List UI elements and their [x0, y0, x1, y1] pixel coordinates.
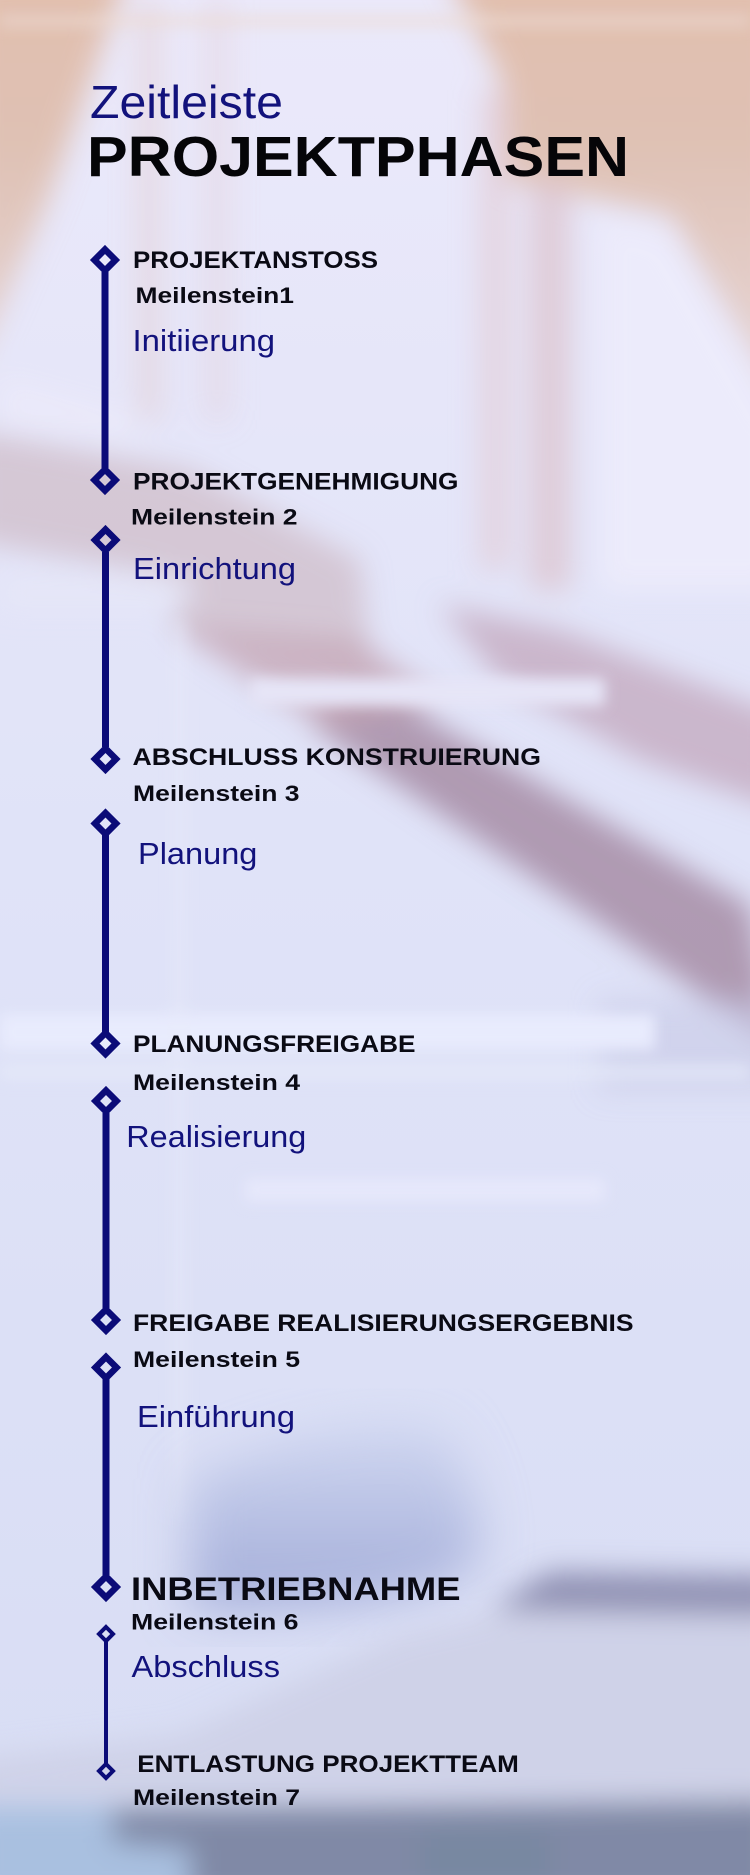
phase 4: Realisierung	[96, 1031, 416, 1330]
timeline bar	[102, 1113, 110, 1308]
phase 2: Einrichtung	[95, 468, 458, 770]
icon: end diamond	[95, 748, 116, 770]
milestone label: Meilenstein 2	[131, 504, 298, 530]
icon: start diamond	[95, 530, 116, 550]
icon: start diamond	[96, 1357, 116, 1378]
milestone title: PLANUNGSFREIGABE	[133, 1031, 416, 1058]
milestone label: Meilenstein 4	[133, 1070, 301, 1095]
timeline bar	[102, 1379, 110, 1575]
phase name: Realisierung	[126, 1119, 306, 1154]
milestone title: PROJEKTANSTOSS	[133, 247, 378, 274]
phase 5: Einführung	[96, 1310, 634, 1598]
icon: start diamond	[96, 1090, 116, 1112]
phase name: Abschluss	[132, 1649, 280, 1684]
title line: Zeitleiste: Zeitleiste	[90, 76, 283, 128]
phase name: Einführung	[137, 1399, 295, 1434]
milestone title: PROJEKTGENEHMIGUNG	[133, 468, 458, 496]
icon: end diamond	[99, 1764, 113, 1778]
milestone title: ENTLASTUNG PROJEKTTEAM	[137, 1751, 519, 1778]
milestone title: FREIGABE REALISIERUNGSERGEBNIS	[133, 1310, 634, 1337]
milestone label: Meilenstein1	[136, 283, 294, 308]
title line: PROJEKTPHASEN: PROJEKTPHASEN	[87, 125, 629, 189]
milestone label: Meilenstein 7	[133, 1785, 300, 1810]
phase name: Initiierung	[132, 323, 275, 358]
milestone label: Meilenstein 5	[133, 1347, 300, 1372]
icon: end diamond	[94, 470, 116, 490]
title	[87, 76, 629, 189]
final milestone	[133, 1751, 519, 1810]
milestone title: ABSCHLUSS KONSTRUIERUNG	[132, 744, 541, 771]
icon: end diamond	[95, 1033, 116, 1054]
icon: end diamond	[96, 1576, 116, 1598]
milestone label: Meilenstein 3	[133, 781, 300, 806]
phase 1: Initiierung	[94, 247, 378, 490]
icon: start diamond	[94, 250, 116, 270]
icon: start diamond	[99, 1627, 113, 1641]
phase name: Planung	[138, 836, 257, 871]
phase name: Einrichtung	[133, 551, 296, 586]
timeline bar	[102, 272, 108, 468]
milestone title: INBETRIEBNAHME	[131, 1571, 460, 1607]
timeline bar	[102, 835, 109, 1032]
phase 6: Abschluss	[99, 1571, 460, 1778]
icon: start diamond	[95, 813, 116, 834]
milestone label: Meilenstein 6	[131, 1610, 298, 1634]
timeline bar	[104, 1642, 108, 1764]
phase 3: Planung	[95, 744, 541, 1054]
icon: end diamond	[96, 1310, 116, 1330]
timeline bar	[102, 552, 109, 747]
